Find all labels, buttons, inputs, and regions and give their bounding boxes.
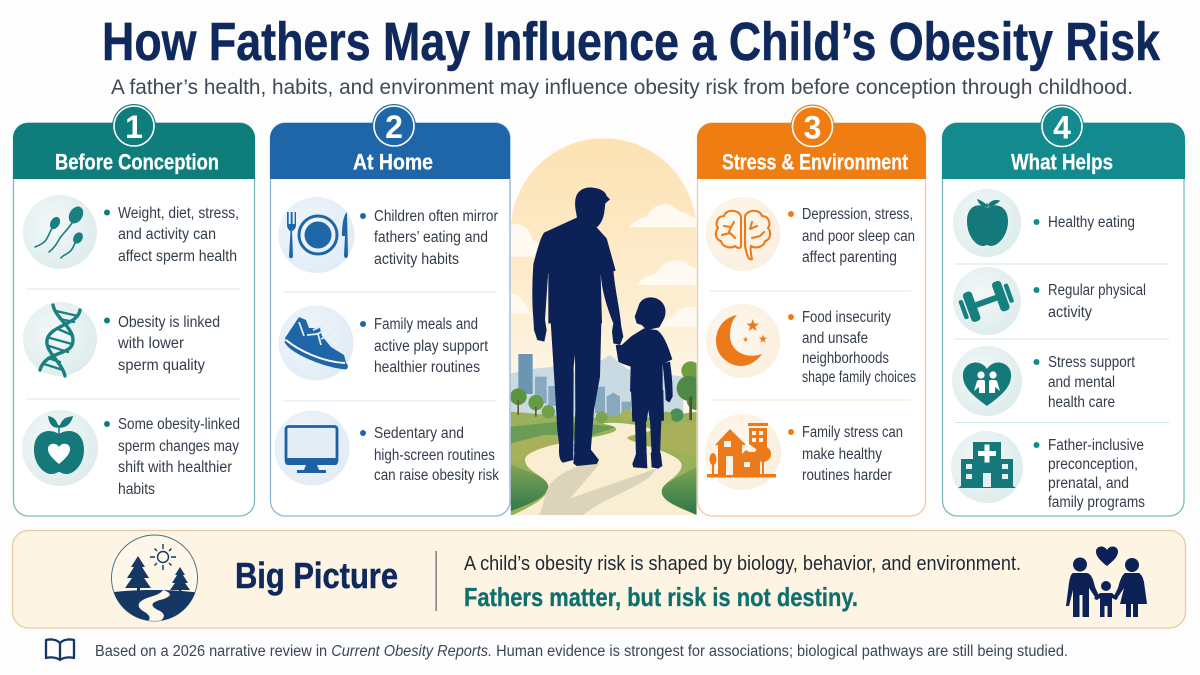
text: family meals xyxy=(360,316,489,376)
text: regular physical: Regular physical xyxy=(1048,282,1146,299)
text: food insecurity xyxy=(788,309,916,386)
text: father-inclusive xyxy=(1034,437,1145,511)
text: some obesity-linked: Some obesity-linked xyxy=(118,416,240,433)
text: family stress: Family stress can xyxy=(802,424,903,441)
text: family stress: make healthy xyxy=(802,446,882,463)
text: regular physical xyxy=(1034,282,1146,321)
icon: heart with people xyxy=(952,346,1022,416)
text: depression: and poor sleep can xyxy=(802,228,915,245)
text: obesity linked: with lower xyxy=(117,335,184,352)
text: stress support: and mental xyxy=(1048,374,1115,391)
icon: dumbbell xyxy=(953,267,1021,335)
text: food insecurity: shape family choices xyxy=(802,369,916,386)
statement: A child’s obesity risk is shaped by biology, behavior, and environment. xyxy=(464,552,1021,575)
text: weight, diet: and activity can xyxy=(118,226,216,243)
text: children mirror xyxy=(360,208,498,268)
heading: Big Picture: Big Picture xyxy=(235,555,398,596)
panel: 4 What Helps xyxy=(942,104,1185,516)
icon: DNA helix xyxy=(23,302,97,376)
badge: 1: 1 xyxy=(125,109,143,145)
badge: 2: 2 xyxy=(385,109,403,145)
text: family meals: active play support xyxy=(374,338,489,355)
text: food insecurity: neighborhoods xyxy=(802,350,889,367)
icon: plate and cutlery xyxy=(278,197,354,273)
icon: houses and trees xyxy=(705,414,781,490)
text: sedentary: Sedentary and xyxy=(374,425,464,442)
text: weight, diet: Weight, diet, stress, xyxy=(118,205,239,222)
text: depression xyxy=(788,206,915,266)
text: some obesity-linked: shift with healthier xyxy=(118,459,232,476)
text: children mirror: Children often mirror xyxy=(374,208,498,225)
text: depression: Depression, stress, xyxy=(802,206,913,223)
text: weight, diet: affect sperm health xyxy=(118,248,237,265)
text: stress support xyxy=(1034,354,1136,411)
badge: 4 xyxy=(1040,104,1084,148)
text: some obesity-linked: habits xyxy=(118,481,155,498)
panel: Big Picture banner xyxy=(12,530,1186,628)
icon: hospital xyxy=(951,431,1023,503)
icon: brain xyxy=(706,197,780,271)
text: food insecurity: and unsafe xyxy=(802,330,868,347)
footer source note: Based on a 2026 narrative review in Current Obesity Reports. Human evidence is strongest for associations; biological pathways are still being studied. xyxy=(95,643,1068,660)
panel: 2 At Home xyxy=(270,104,510,516)
text: father-inclusive: family programs xyxy=(1048,494,1145,511)
icon: apple xyxy=(953,189,1021,257)
panel: 3 Stress and Environment xyxy=(697,104,926,516)
text: family meals: Family meals and xyxy=(374,316,478,333)
badge: 3: 3 xyxy=(804,110,821,146)
text: regular physical: activity xyxy=(1048,304,1092,321)
center illustration: father and son walking xyxy=(502,138,707,515)
heading: Stress & Environment: Stress & Environment xyxy=(722,150,909,174)
icon: landscape logo xyxy=(108,535,200,625)
text: sedentary: high-screen routines xyxy=(374,447,495,464)
text: father-inclusive: preconception, xyxy=(1048,456,1138,473)
text: father-inclusive: prenatal, and xyxy=(1048,475,1129,492)
text: sedentary xyxy=(360,425,499,484)
text: father-inclusive: Father-inclusive xyxy=(1048,437,1144,454)
key message: Fathers matter, but risk is not destiny. xyxy=(464,582,858,612)
text: obesity linked: Obesity is linked xyxy=(118,314,220,331)
text: children mirror: fathers’ eating and xyxy=(374,229,488,246)
icon: monitor xyxy=(274,410,350,486)
text: family stress: routines harder xyxy=(802,467,892,484)
icon: sneaker xyxy=(278,306,354,380)
heading: What Helps: What Helps xyxy=(1011,150,1113,174)
icon: open book xyxy=(46,639,74,660)
text: food insecurity: Food insecurity xyxy=(802,309,891,326)
badge: 1 xyxy=(112,104,156,148)
text: children mirror: activity habits xyxy=(374,251,459,268)
text: obesity linked: sperm quality xyxy=(118,357,205,374)
icon: apple with heart xyxy=(22,410,98,486)
text: some obesity-linked: sperm changes may xyxy=(118,438,239,455)
text: some obesity-linked xyxy=(104,416,240,498)
heading: At Home: At Home xyxy=(353,150,433,174)
icon: moon and stars xyxy=(706,304,780,378)
badge: 4: 4 xyxy=(1053,110,1071,146)
text: depression: affect parenting xyxy=(802,249,897,266)
text: family stress xyxy=(788,424,903,484)
badge: 2 xyxy=(372,104,416,148)
text: healthy eating: Healthy eating xyxy=(1048,214,1135,231)
text: stress support: Stress support xyxy=(1048,354,1136,371)
text: sedentary: can raise obesity risk xyxy=(374,467,499,484)
icon: sperm cells xyxy=(23,195,97,269)
text: family meals: healthier routines xyxy=(374,359,480,376)
text: obesity linked xyxy=(104,314,220,374)
text: stress support: health care xyxy=(1048,394,1115,411)
badge: 3 xyxy=(790,104,834,148)
icon: family xyxy=(1066,547,1147,617)
panel: 1 Before Conception xyxy=(13,104,255,516)
heading: Before Conception: Before Conception xyxy=(55,150,219,174)
subtitle: A father’s health, habits, and environment may influence obesity risk from before conception through childhood. xyxy=(111,76,1133,99)
text: weight, diet xyxy=(104,205,239,265)
